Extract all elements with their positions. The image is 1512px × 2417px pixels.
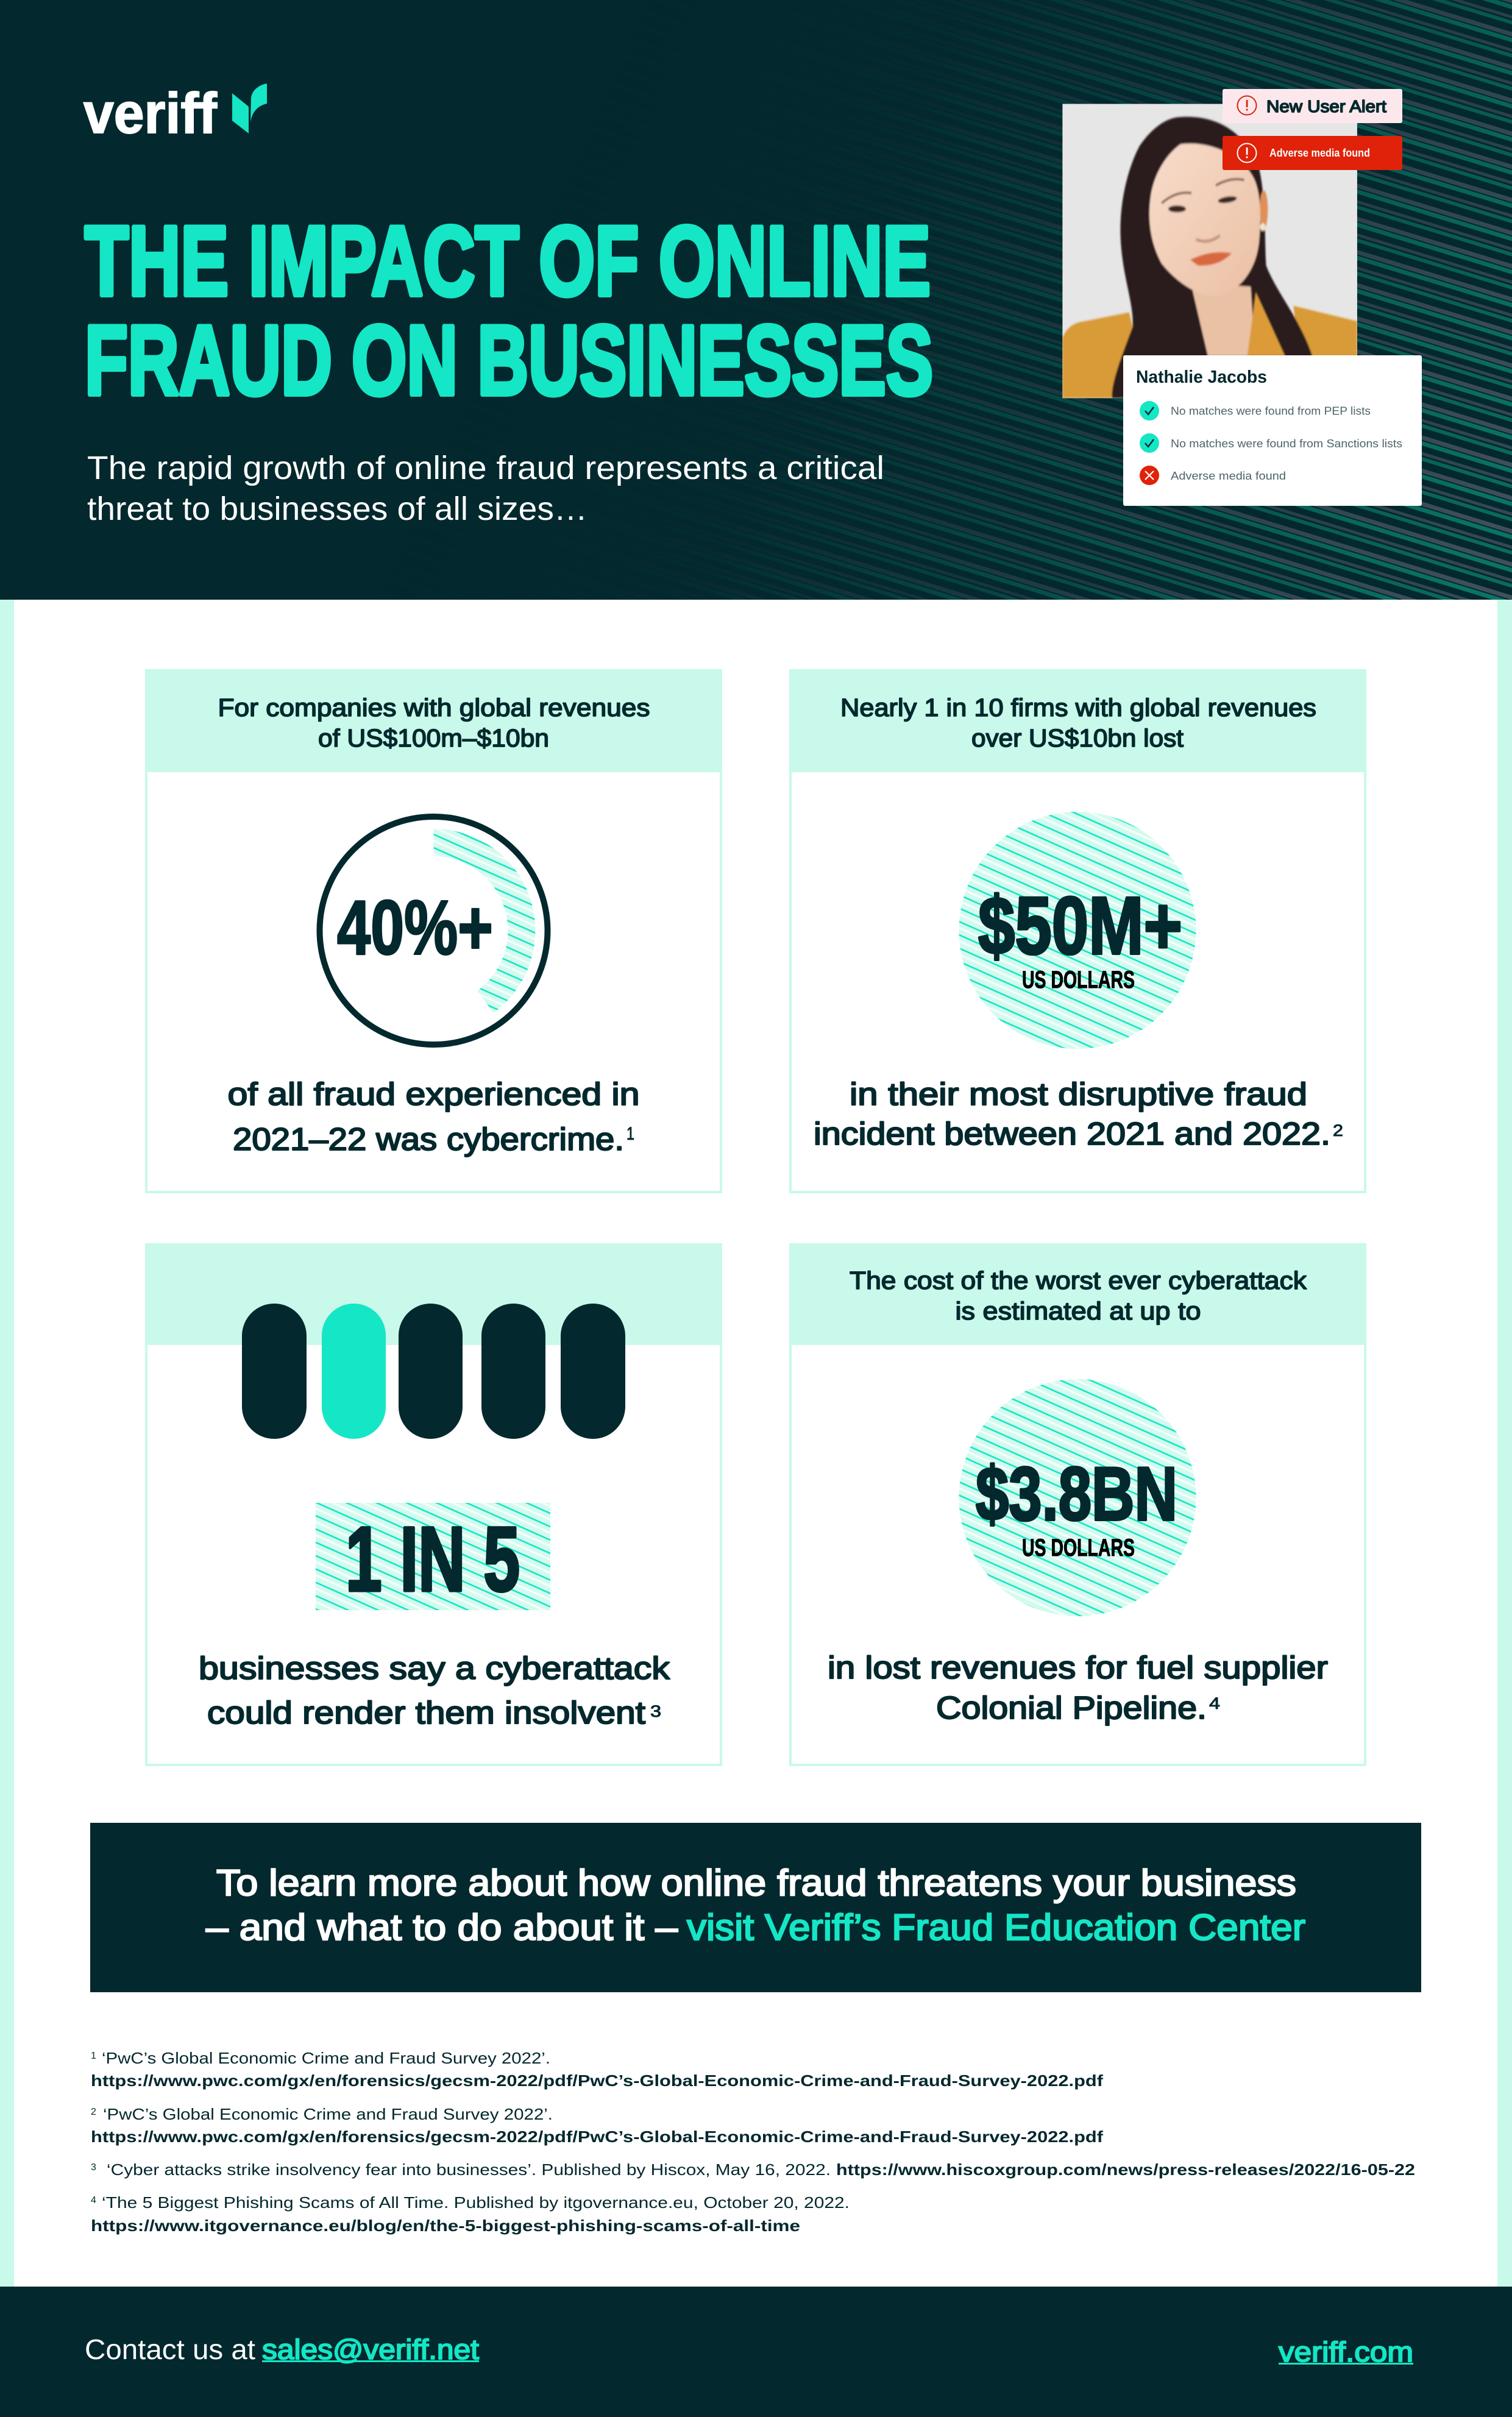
panel body text bbox=[199, 1651, 670, 1731]
contact text: Contact us at bbox=[85, 2334, 255, 2365]
footnote 1: https://www.pwc.com/gx/en/forensics/gecsm-2022/pdf/PwC’s-Global-Economic-Crime-and-Fraud-Survey-2022.pdf bbox=[91, 2071, 1103, 2090]
panel body text: of all fraud experienced in bbox=[228, 1077, 640, 1112]
profile name: Nathalie Jacobs bbox=[1136, 367, 1267, 387]
call to action: – and what to do about it – bbox=[206, 1907, 678, 1948]
panel heading bbox=[850, 1266, 1307, 1325]
alert: New User Alert bbox=[1223, 89, 1402, 123]
panel body text bbox=[828, 1650, 1328, 1726]
panel body text: 4 bbox=[1209, 1694, 1220, 1712]
panel body text bbox=[228, 1077, 640, 1157]
panel body text: 2021–22 was cybercrime. bbox=[233, 1122, 624, 1157]
footnote 2: 2 bbox=[91, 2107, 96, 2117]
stat: $3.8BN: $3.8BN bbox=[976, 1452, 1177, 1536]
footnote 2: ‘PwC’s Global Economic Crime and Fraud Survey 2022’. bbox=[103, 2105, 553, 2123]
panel heading: The cost of the worst ever cyberattack bbox=[850, 1266, 1307, 1294]
panel heading: For companies with global revenues bbox=[218, 694, 650, 722]
call to action bbox=[90, 1823, 1421, 1992]
footnote 1: ‘PwC’s Global Economic Crime and Fraud Survey 2022’. bbox=[102, 2049, 550, 2067]
title: FRAUD ON BUSINESSES bbox=[85, 305, 933, 416]
footnote 1: 1 bbox=[91, 2051, 96, 2061]
call to action: To learn more about how online fraud threatens your business bbox=[216, 1862, 1296, 1903]
pictogram: five pills, one highlighted bbox=[242, 1304, 625, 1439]
stat: 1 IN 5: 1 IN 5 bbox=[346, 1508, 520, 1610]
check row: PEP bbox=[1140, 401, 1371, 421]
footnote 1 bbox=[91, 2049, 1103, 2090]
profile card bbox=[1123, 355, 1422, 506]
hatched circle bbox=[959, 812, 1196, 1049]
alert: Adverse media found bbox=[1223, 136, 1402, 170]
panel body text: Colonial Pipeline. bbox=[936, 1691, 1207, 1726]
panel heading: Nearly 1 in 10 firms with global revenues bbox=[840, 694, 1316, 722]
footnote 4: https://www.itgovernance.eu/blog/en/the-5-biggest-phishing-scams-of-all-time bbox=[91, 2216, 800, 2235]
alert: Adverse media found: Adverse media found bbox=[1269, 147, 1370, 159]
panel: $50M+ bbox=[789, 669, 1366, 1192]
footnote 3: https://www.hiscoxgroup.com/news/press-releases/2022/16-05-22 bbox=[836, 2160, 1415, 2179]
hatched block bbox=[316, 1503, 550, 1610]
footnote 2 bbox=[91, 2105, 1103, 2146]
photo: portrait of Nathalie Jacobs bbox=[1062, 104, 1357, 398]
cross row: Adverse media bbox=[1140, 466, 1286, 485]
check row: Sanctions bbox=[1140, 433, 1402, 453]
panel heading: is estimated at up to bbox=[956, 1297, 1201, 1325]
panel heading bbox=[218, 694, 650, 752]
header banner bbox=[0, 0, 1512, 600]
panel body text: 2 bbox=[1333, 1121, 1343, 1140]
panel body text: 3 bbox=[650, 1702, 661, 1720]
footnote 4: ‘The 5 Biggest Phishing Scams of All Time. Published by itgovernance.eu, October 20, 2022. bbox=[102, 2193, 850, 2212]
website link: veriff.com bbox=[1279, 2336, 1413, 2368]
footnote 4 bbox=[91, 2193, 850, 2235]
panel heading: of US$100m–$10bn bbox=[318, 724, 549, 752]
subtitle: threat to businesses of all sizes… bbox=[87, 491, 587, 527]
panel body text: incident between 2021 and 2022. bbox=[814, 1116, 1330, 1152]
stat: $50M+: $50M+ bbox=[978, 881, 1182, 971]
hatched circle bbox=[959, 1379, 1196, 1616]
contact text: sales@veriff.net bbox=[262, 2334, 479, 2365]
footnote 3: 3 bbox=[91, 2162, 96, 2173]
panel: 40%+ bbox=[145, 669, 722, 1192]
title: THE IMPACT OF ONLINE bbox=[85, 206, 931, 316]
stat unit: US DOLLARS bbox=[1022, 967, 1135, 993]
panel body text: in their most disruptive fraud bbox=[850, 1077, 1307, 1112]
alert: New User Alert: New User Alert bbox=[1266, 97, 1386, 116]
logo: veriff: veriff bbox=[83, 81, 218, 145]
footnotes bbox=[91, 2049, 1415, 2235]
panel body text bbox=[814, 1077, 1343, 1152]
contact text bbox=[85, 2334, 479, 2365]
panel body text: businesses say a cyberattack bbox=[199, 1651, 670, 1686]
footnote 3: ‘Cyber attacks strike insolvency fear into businesses’. Published by Hiscox, May 16, 2022. bbox=[107, 2160, 831, 2179]
panel: 1 in 5 bbox=[145, 1243, 722, 1765]
subtitle bbox=[87, 450, 884, 527]
panel: $3.8BN bbox=[789, 1243, 1366, 1765]
stat unit: US DOLLARS bbox=[1022, 1535, 1135, 1561]
check row: Sanctions: No matches were found from Sanctions lists bbox=[1171, 437, 1402, 450]
check row: PEP: No matches were found from PEP lists bbox=[1171, 405, 1371, 417]
footnote 2: https://www.pwc.com/gx/en/forensics/gecsm-2022/pdf/PwC’s-Global-Economic-Crime-and-Fraud-Survey-2022.pdf bbox=[91, 2128, 1103, 2146]
panel heading bbox=[840, 694, 1316, 752]
call to action: visit Veriff’s Fraud Education Center bbox=[687, 1907, 1305, 1948]
ring chart with 40% arc bbox=[319, 817, 547, 1045]
cross row: Adverse media: Adverse media found bbox=[1171, 469, 1286, 482]
panel heading: over US$10bn lost bbox=[971, 724, 1184, 752]
footnote 4: 4 bbox=[91, 2195, 96, 2206]
stat: 40%+: 40%+ bbox=[337, 885, 493, 970]
footnote 3 bbox=[91, 2160, 1415, 2179]
footer bbox=[0, 2287, 1512, 2417]
subtitle: The rapid growth of online fraud represents a critical bbox=[87, 450, 884, 486]
panel body text: in lost revenues for fuel supplier bbox=[828, 1650, 1328, 1686]
panel body text: 1 bbox=[626, 1124, 634, 1144]
title bbox=[85, 206, 933, 416]
panel body text: could render them insolvent bbox=[207, 1695, 646, 1731]
